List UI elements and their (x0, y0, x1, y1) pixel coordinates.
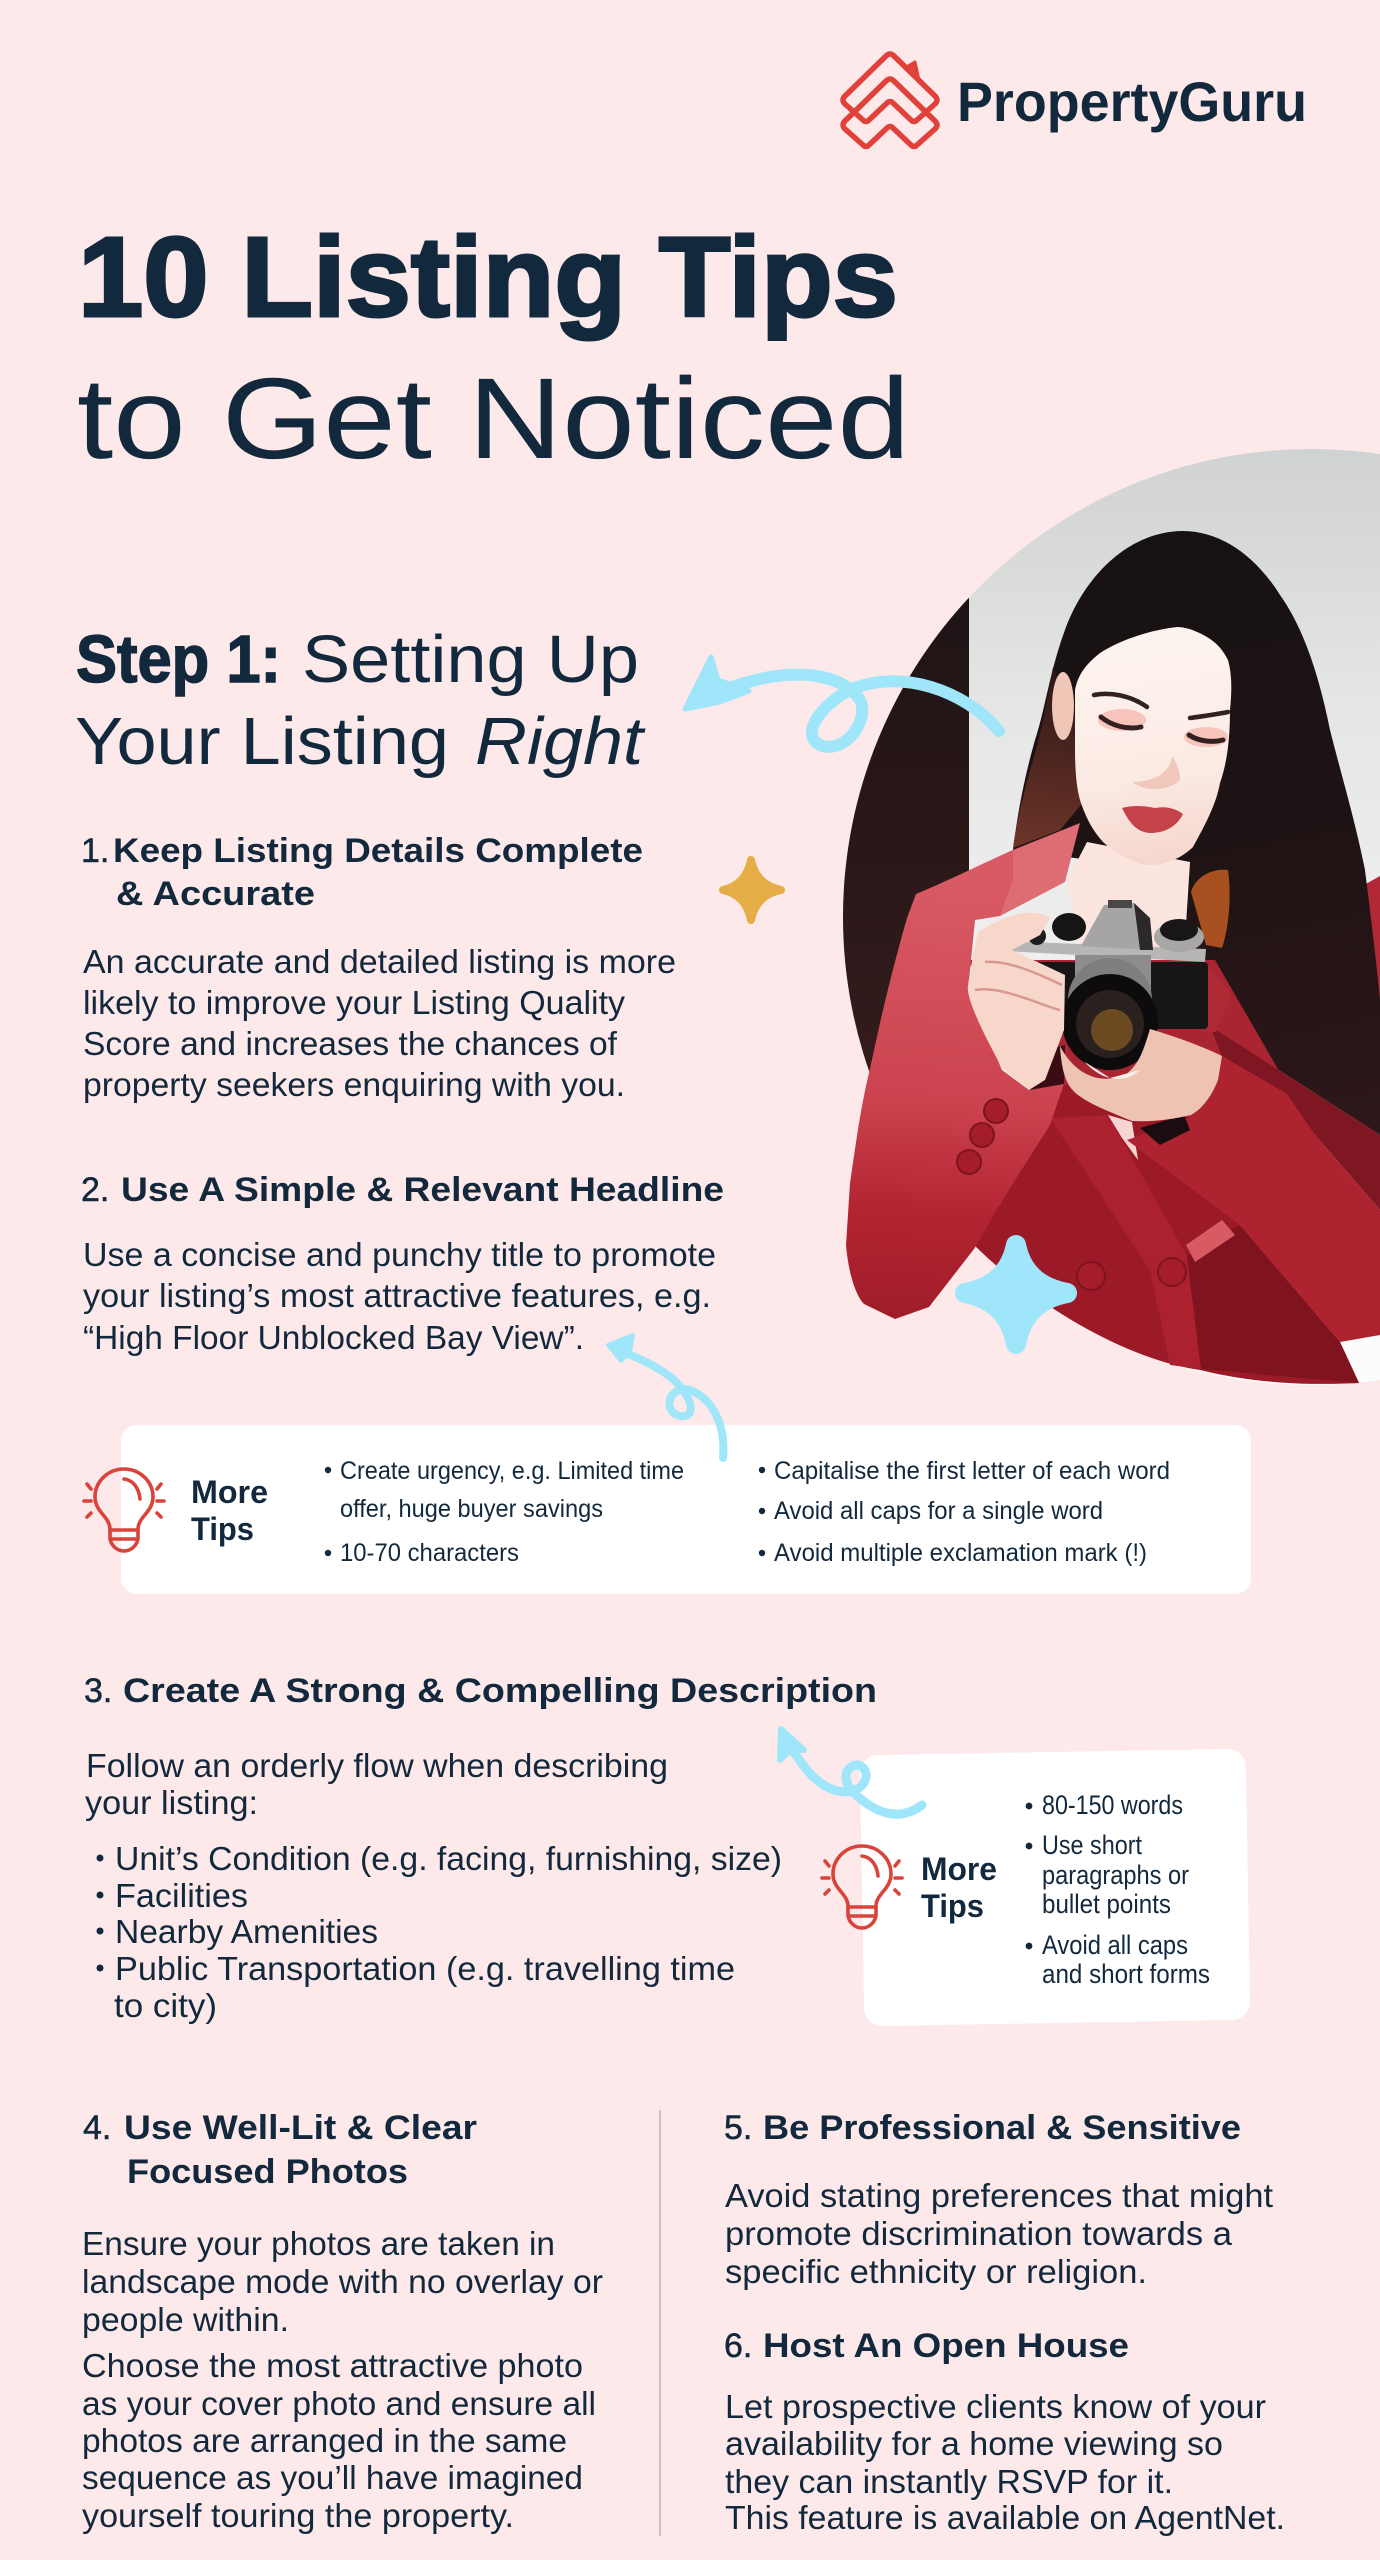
arrow: blue loop pointing to tip 3 (780, 1729, 922, 1814)
tip 3 bullets: Nearby Amenities (115, 1913, 378, 1950)
tip 4: well-lit and clear focused photos: Focused Photos (127, 2153, 408, 2191)
face (1075, 627, 1231, 865)
title (77, 214, 910, 483)
camera (1003, 900, 1208, 1070)
tip 5 body (725, 2177, 1273, 2290)
tip 3 body: your listing: (85, 1784, 258, 1821)
reddish hair strands on the left (1013, 667, 1085, 848)
tip 3 bullets (96, 1840, 782, 2024)
tip 2: simple and relevant headline: 2. (81, 1171, 109, 1209)
left hand (968, 913, 1065, 1090)
tip 3: strong and compelling description: Create A Strong & Compelling Description (123, 1672, 877, 1710)
title: 10 Listing Tips (78, 214, 898, 340)
arrow: blue loop pointing to tip 2 (608, 1335, 723, 1458)
icon: house chevrons (843, 54, 937, 146)
tip 4 body: photos are arranged in the same (82, 2422, 567, 2459)
right hand (1060, 1029, 1222, 1121)
tip 4: well-lit and clear focused photos: Use Well-Lit & Clear (124, 2109, 477, 2147)
more tips label (191, 1474, 268, 1547)
photo: woman holding a camera in a circle (840, 440, 1380, 1390)
more tips label: More (921, 1851, 997, 1887)
tip 2 body: your listing’s most attractive features, e.g. (83, 1277, 711, 1314)
logo wordmark: PropertyGuru (957, 70, 1307, 133)
nose shadow (1132, 756, 1180, 789)
icon: gold sparkle (723, 860, 781, 920)
tip 4 body: as your cover photo and ensure all (82, 2385, 596, 2422)
orange hair strand (1191, 870, 1230, 948)
cuff buttons (957, 1099, 1186, 1290)
icon: blue sparkle (965, 1245, 1067, 1344)
tip 2: simple and relevant headline (81, 1171, 724, 1356)
tip 6 body: availability for a home viewing so (725, 2425, 1223, 2462)
tips column right (759, 1457, 1170, 1567)
panel: more tips 2 (822, 1749, 1250, 2026)
tip 6 body: This feature is available on AgentNet. (725, 2499, 1285, 2536)
tips list: 80-150 words (1042, 1790, 1183, 1820)
tip 2 body: Use a concise and punchy title to promote (83, 1236, 716, 1273)
tip 2 body (83, 1236, 716, 1356)
tips list: and short forms (1042, 1959, 1210, 1989)
more tips label: Tips (921, 1888, 984, 1924)
tip 4 body: people within. (82, 2301, 289, 2338)
mouth (1122, 806, 1183, 833)
jacket body (974, 1084, 1359, 1384)
chest and neck (1067, 842, 1190, 965)
tip 5: be professional and sensitive (724, 2109, 1273, 2290)
tip 3 bullets: Facilities (115, 1877, 248, 1914)
arrow: blue loop pointing to heading (685, 657, 999, 747)
icon: light bulb (822, 1846, 902, 1928)
eyes, shadow and brows (1094, 694, 1228, 747)
tip 1 body: likely to improve your Listing Quality (83, 984, 626, 1021)
right sleeve (1127, 1056, 1380, 1342)
tip 6 body: they can instantly RSVP for it. (725, 2463, 1173, 2500)
tip 1 body: An accurate and detailed listing is more (83, 943, 676, 980)
tip 6: host an open house: Host An Open House (763, 2327, 1129, 2365)
tips list: paragraphs or (1042, 1860, 1189, 1890)
jacket sleeve shadow on right (1210, 1026, 1380, 1210)
tip 6 body (725, 2388, 1285, 2536)
tip 3: strong and compelling description: 3. (84, 1672, 112, 1710)
red shoulder behind hair (1364, 876, 1380, 1010)
right lapel behind camera (1205, 962, 1232, 1032)
tip 5 body: promote discrimination towards a (725, 2215, 1233, 2252)
tips column right: Avoid all caps for a single word (774, 1497, 1103, 1525)
tip 1 body: Score and increases the chances of (83, 1025, 618, 1062)
tips column left: 10-70 characters (340, 1539, 519, 1567)
tip 4: well-lit and clear focused photos: 4. (83, 2109, 111, 2147)
tip 1: keep listing details complete: Keep Listing Details Complete (113, 832, 643, 870)
logo: PropertyGuru (843, 54, 1307, 146)
tip 5: be professional and sensitive: 5. (724, 2109, 752, 2147)
jacket lapel (1050, 1115, 1201, 1369)
tip 3 bullets: to city) (114, 1987, 217, 2024)
tip 4: well-lit and clear focused photos (82, 2109, 603, 2534)
tip 4 body: Ensure your photos are taken in (82, 2225, 555, 2262)
title: to Get Noticed (77, 355, 910, 483)
tip 6 body: Let prospective clients know of your (725, 2388, 1266, 2425)
tip 5 body: specific ethnicity or religion. (725, 2253, 1147, 2290)
more tips label: More (191, 1474, 268, 1510)
jacket highlight (1186, 1220, 1235, 1262)
heading: Step 1: Setting Up (302, 622, 639, 697)
tips list (1026, 1790, 1210, 1989)
more tips label: Tips (191, 1511, 254, 1547)
left collar (974, 823, 1080, 916)
icon: light bulb (84, 1469, 164, 1551)
tip 4 body: yourself touring the property. (82, 2497, 514, 2534)
tip 2: simple and relevant headline: Use A Simple & Relevant Headline (121, 1171, 724, 1209)
tips column left (325, 1457, 684, 1567)
tip 5: be professional and sensitive: Be Professional & Sensitive (763, 2109, 1241, 2147)
ear (1052, 672, 1074, 740)
tip 3 bullets: Unit’s Condition (e.g. facing, furnishing, size) (115, 1840, 782, 1877)
heading: Step 1 (75, 622, 646, 779)
jacket shadow (1187, 1225, 1359, 1383)
tip 4 body: Choose the most attractive photo (82, 2347, 583, 2384)
tip 4 body: sequence as you’ll have imagined (82, 2459, 583, 2496)
tip 5 body: Avoid stating preferences that might (725, 2177, 1273, 2214)
heading: Step 1: Right (475, 704, 646, 779)
dark cuff insides (1029, 1045, 1065, 1090)
panel: more tips 1 (84, 1425, 1251, 1594)
tips column left: offer, huge buyer savings (340, 1495, 603, 1523)
tip 3 body (85, 1747, 668, 1821)
tip 4 body (82, 2225, 603, 2534)
tip 2 body: “High Floor Unblocked Bay View”. (83, 1319, 584, 1356)
tip 1 body: property seekers enquiring with you. (83, 1066, 625, 1103)
tips list: Avoid all caps (1042, 1930, 1188, 1960)
jacket base behind camera and hands (968, 960, 1290, 1225)
tips list: Use short (1042, 1830, 1142, 1860)
tip 3 body: Follow an orderly flow when describing (86, 1747, 668, 1784)
heading: Step 1: Your Listing (75, 704, 449, 779)
tips column right: Avoid multiple exclamation mark (!) (774, 1539, 1147, 1567)
tip 6: host an open house: 6. (724, 2327, 752, 2365)
tip 1 body (83, 943, 676, 1103)
tip 6: host an open house (724, 2327, 1285, 2536)
heading: Step 1: Step 1: (76, 622, 281, 697)
left arm (846, 850, 1064, 1319)
tip 3: strong and compelling description (84, 1672, 877, 2024)
tip 1: keep listing details complete: 1. (81, 832, 109, 870)
tips list: bullet points (1042, 1889, 1171, 1919)
tip 4 body: landscape mode with no overlay or (82, 2263, 603, 2300)
hair (1013, 531, 1380, 1135)
shirt (1108, 1115, 1138, 1160)
more tips label (921, 1851, 997, 1924)
circle background (840, 440, 1380, 1390)
tip 1: keep listing details complete: & Accurate (116, 875, 315, 913)
tips column right: Capitalise the first letter of each word (774, 1457, 1170, 1485)
tip 1: keep listing details complete (81, 832, 676, 1103)
tips column left: Create urgency, e.g. Limited time (340, 1457, 684, 1485)
tip 3 bullets: Public Transportation (e.g. travelling time (115, 1950, 735, 1987)
